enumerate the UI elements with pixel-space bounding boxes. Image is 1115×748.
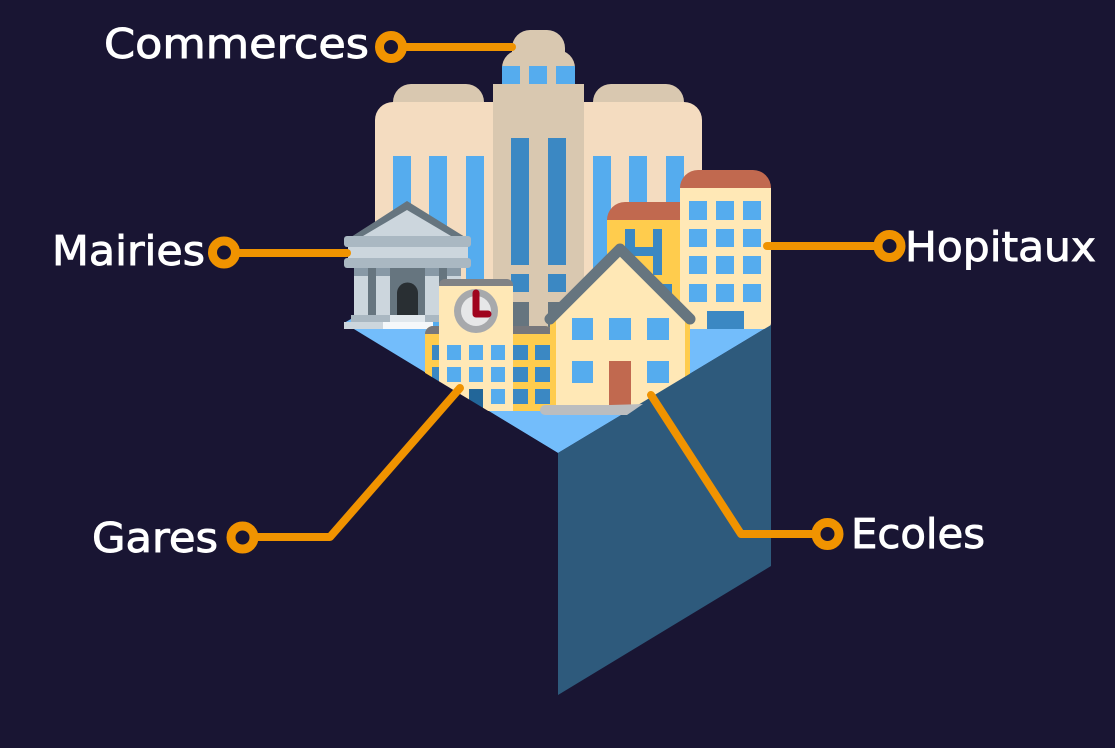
icon: house — [540, 249, 690, 415]
callout: Commerces — [104, 20, 512, 68]
callout: Hopitaux: Hopitaux — [905, 223, 1096, 271]
icon: hospital — [607, 202, 687, 329]
background cut: left underside of the block — [0, 330, 558, 748]
house base tip overlapping the block edge — [610, 404, 643, 415]
floor: light blue top of block — [344, 200, 771, 453]
callout: Gares: Gares — [92, 514, 218, 562]
callout: Mairies: Mairies — [52, 227, 205, 275]
callout: Ecoles: Ecoles — [851, 510, 985, 558]
callout: Mairies — [52, 227, 347, 275]
callout: Gares — [92, 388, 460, 562]
icon: town hall — [344, 201, 471, 329]
icon: apartment building — [680, 170, 771, 329]
block: dark blue side face — [558, 325, 771, 695]
callout: Commerces: Commerces — [104, 20, 369, 68]
callout: Ecoles — [651, 395, 985, 558]
icon: office tower — [375, 30, 702, 329]
icon: train station — [425, 279, 553, 411]
callout: Hopitaux — [767, 223, 1096, 271]
